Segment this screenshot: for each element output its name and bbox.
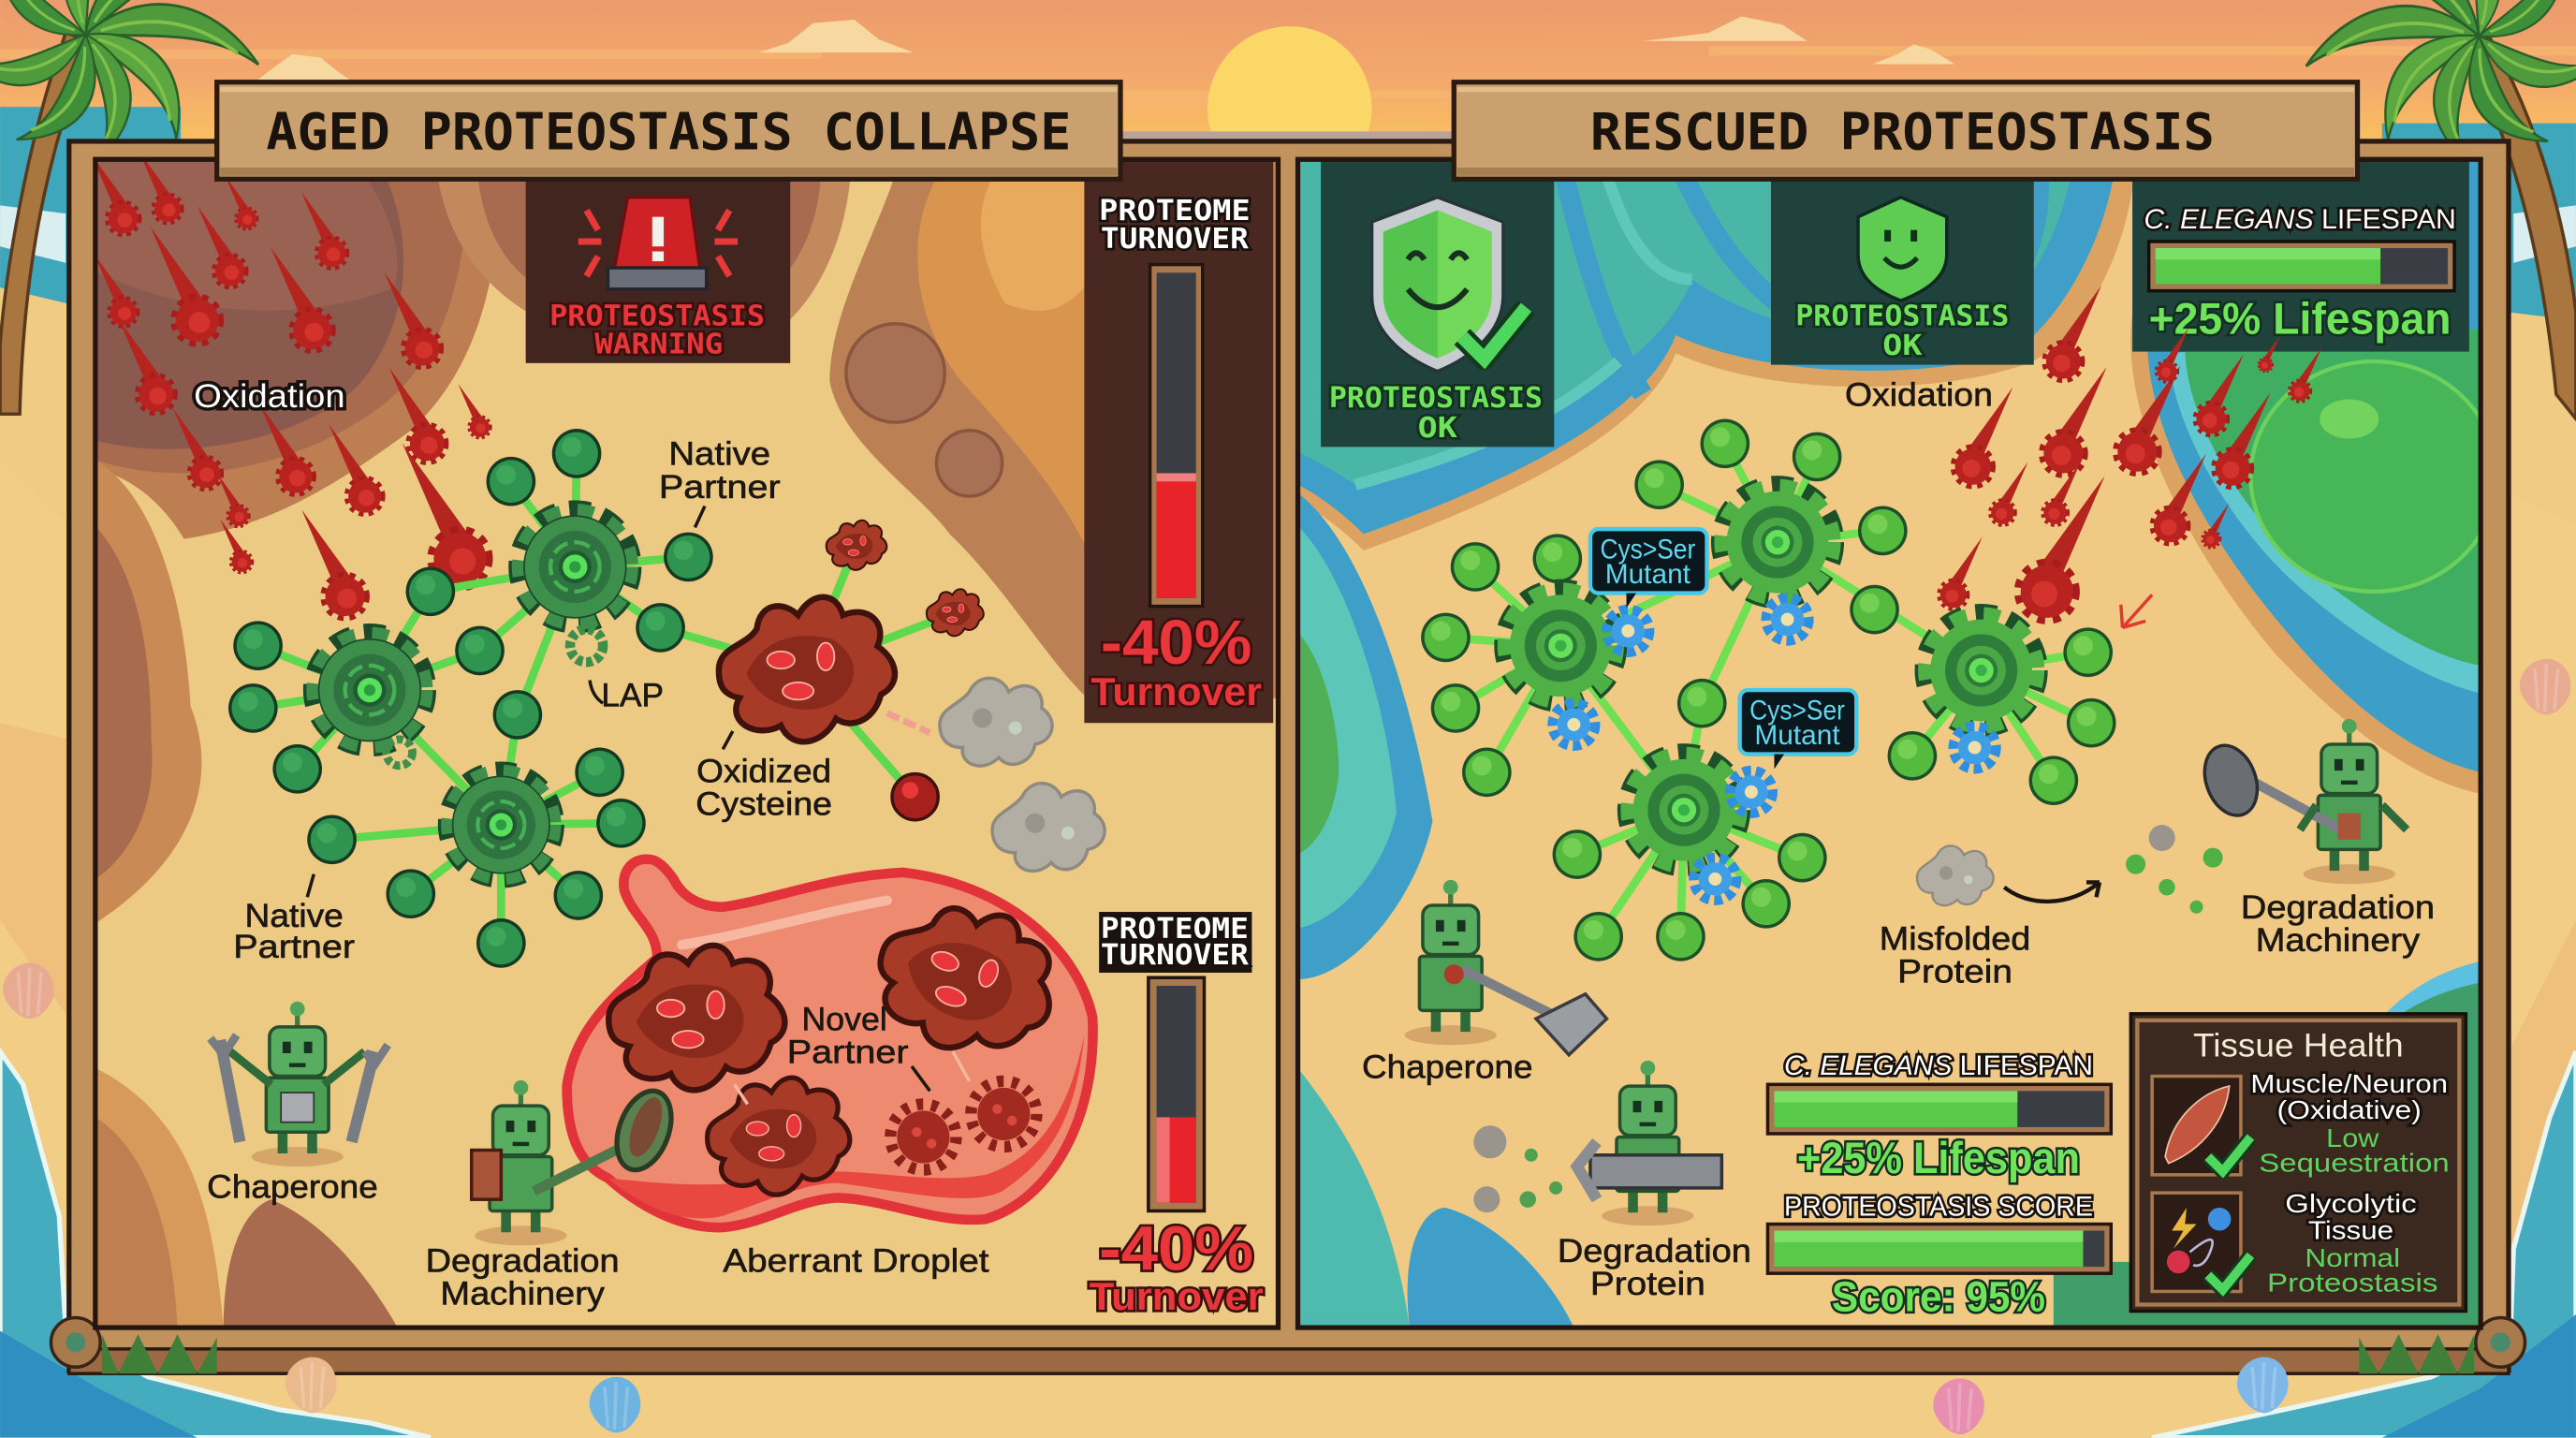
green bottom right — [2054, 961, 2481, 1328]
glycolytic text: Glycolytic — [2285, 1189, 2417, 1218]
panel: rescued right — [1298, 159, 2497, 1328]
glycolytic text: Normal — [2305, 1243, 2400, 1272]
turnover value 2: Turnover — [1090, 1274, 1264, 1318]
palm tree left — [0, 0, 268, 414]
status text — [1795, 301, 2011, 358]
lifespan value lower: +25% Lifespan — [1797, 1134, 2080, 1183]
water bottom left — [1298, 1068, 1573, 1328]
shield status — [1329, 382, 1543, 445]
lifespan bar — [2149, 242, 2454, 291]
label: Oxidation right: Oxidation — [1845, 376, 1993, 413]
bottom left water — [0, 1051, 431, 1438]
turnover value 2 — [1090, 1215, 1264, 1318]
rescued network links — [1445, 444, 2091, 936]
degradation machinery robot — [2195, 719, 2407, 884]
tissue health panel — [2130, 1014, 2466, 1312]
chaperone robot right — [1405, 880, 1606, 1055]
turnover value — [1090, 609, 1262, 713]
muscle text: Sequestration — [2259, 1148, 2450, 1177]
lifespan label lower: C. ELEGANS LIFESPAN — [1784, 1050, 2093, 1081]
aberrant droplet — [567, 859, 1093, 1227]
panel: aged left — [91, 151, 1281, 1328]
frame corner posts — [51, 1318, 2525, 1373]
left labels: Aberrant Droplet — [723, 1242, 989, 1279]
icon: muscle — [2152, 1077, 2250, 1175]
sun — [1208, 26, 1372, 191]
icon: glycolytic molecules — [2152, 1193, 2250, 1291]
lifespan panel — [2132, 159, 2469, 352]
rock top middle — [438, 182, 850, 320]
turnover label: PROTEOME — [1099, 195, 1251, 227]
status panel — [1771, 182, 2034, 365]
sky — [0, 0, 2576, 172]
shield status: OK — [1418, 412, 1457, 445]
water and green island right — [2130, 159, 2497, 794]
turnover label 2: TURNOVER — [1101, 939, 1249, 972]
muscle text — [2250, 1069, 2450, 1177]
rescued title text: RESCUED PROTEOSTASIS — [1590, 103, 2215, 162]
warning panel — [526, 182, 790, 363]
score bar — [1767, 1224, 2111, 1273]
seashells — [3, 659, 2570, 1434]
oxidation comets right — [1939, 286, 2321, 627]
lifespan chart — [1767, 1050, 2111, 1321]
water left — [1298, 493, 1432, 979]
right labels: Machinery — [2256, 922, 2421, 959]
turnover bar — [1150, 265, 1203, 607]
degradation robot left — [472, 1080, 681, 1245]
rescued partner balls — [1421, 419, 2116, 961]
callout: Cys>Ser mutant: Cys>Ser — [1600, 535, 1695, 565]
sea left — [0, 107, 181, 304]
shield panel — [1321, 159, 1554, 447]
score value: Score: 95% — [1832, 1273, 2045, 1321]
right labels: Degradation — [1558, 1233, 1751, 1269]
warning text: WARNING — [594, 328, 723, 360]
turnover value: -40% — [1101, 609, 1251, 678]
aged title text: AGED PROTEOSTASIS COLLAPSE — [266, 103, 1071, 162]
right labels: Protein — [1590, 1266, 1705, 1302]
turnover label 2: PROTEOME — [1101, 913, 1249, 946]
left labels: Chaperone — [207, 1168, 378, 1205]
left labels: Degradation — [426, 1242, 620, 1279]
left labels: Partner — [659, 469, 781, 506]
left labels: Native — [245, 898, 344, 934]
icon: smiling shield with check — [1372, 198, 1526, 372]
turnover value: Turnover — [1090, 669, 1262, 713]
turnover label 2 — [1099, 912, 1251, 973]
left labels: Oxidized — [696, 753, 831, 789]
sign: rescued title — [1454, 82, 2358, 179]
score label: PROTEOSTASIS SCORE — [1784, 1192, 2093, 1223]
sea right — [2382, 124, 2576, 320]
protein gears — [314, 511, 631, 878]
panel borders — [95, 159, 2481, 1328]
warning text — [549, 301, 766, 356]
status text: OK — [1882, 330, 1922, 362]
chaperone robot left — [211, 1002, 388, 1167]
clouds — [255, 17, 1955, 82]
rock mid left — [95, 460, 201, 923]
glycolytic text — [2267, 1189, 2438, 1297]
callout: Cys>Ser mutant — [1590, 529, 1707, 608]
callout: Cys>Ser mutant 2 — [1740, 690, 1856, 769]
muscle text: (Oxidative) — [2277, 1095, 2422, 1124]
left labels — [207, 436, 989, 1312]
right labels: Degradation — [2241, 889, 2435, 926]
callout: Cys>Ser mutant 2: Cys>Ser — [1749, 696, 1845, 726]
lifespan value: +25% Lifespan — [2149, 294, 2452, 344]
native partner balls — [228, 429, 713, 968]
protein network links — [276, 477, 932, 919]
status text: PROTEOSTASIS — [1795, 300, 2009, 332]
rescued gears — [1505, 486, 2037, 866]
sign: aged title — [217, 82, 1120, 179]
label: Oxidation: Oxidation — [194, 378, 345, 415]
oxidized cysteine blobs — [719, 521, 984, 820]
right labels: Misfolded — [1880, 920, 2030, 957]
rock top left — [95, 159, 501, 539]
callout: Cys>Ser mutant: Mutant — [1605, 559, 1691, 590]
water top — [1298, 159, 2136, 550]
degradation protein robot — [1473, 1061, 1721, 1225]
turnover value 2: -40% — [1099, 1215, 1253, 1284]
warning text: PROTEOSTASIS — [549, 300, 765, 332]
right labels: Chaperone — [1362, 1049, 1532, 1085]
left labels: Partner — [787, 1034, 909, 1071]
turnover bar 2 — [1149, 977, 1204, 1211]
turnover panel — [1084, 159, 1273, 723]
left labels: Cysteine — [695, 785, 832, 822]
palm tree right — [2297, 0, 2576, 419]
left labels: Novel — [802, 1001, 887, 1037]
left labels: Machinery — [440, 1275, 605, 1312]
turnover overlay — [1090, 912, 1264, 1318]
icon: happy shield — [1858, 198, 1947, 301]
right labels — [1362, 889, 2435, 1302]
mutant blue gears — [1553, 598, 1996, 901]
left labels: Partner — [233, 929, 355, 965]
glycolytic text: Tissue — [2308, 1215, 2393, 1244]
icon: red siren — [578, 198, 738, 289]
callout: Cys>Ser mutant 2: Mutant — [1754, 720, 1840, 751]
tissue heading: Tissue Health — [2193, 1027, 2404, 1064]
oxidation comets — [91, 151, 490, 618]
muscle text: Low — [2326, 1123, 2379, 1152]
lifespan label: C. ELEGANS LIFESPAN — [2144, 204, 2456, 235]
left labels: Native — [668, 436, 770, 473]
shield status: PROTEOSTASIS — [1329, 382, 1543, 415]
misfolded protein — [1917, 825, 2223, 914]
lifespan bar lower — [1767, 1084, 2111, 1134]
bottom right water — [2152, 1051, 2576, 1438]
muscle text: Muscle/Neuron — [2250, 1069, 2448, 1098]
turnover label — [1099, 195, 1251, 256]
glycolytic text: Proteostasis — [2267, 1268, 2438, 1297]
sand shading — [0, 287, 2576, 526]
rock top right — [829, 159, 1281, 698]
misfolded grey blobs — [887, 678, 1105, 871]
rock bottom left — [95, 1068, 398, 1328]
left labels: LAP — [601, 678, 664, 714]
turnover label: TURNOVER — [1101, 223, 1249, 256]
right labels: Protein — [1897, 954, 2012, 990]
